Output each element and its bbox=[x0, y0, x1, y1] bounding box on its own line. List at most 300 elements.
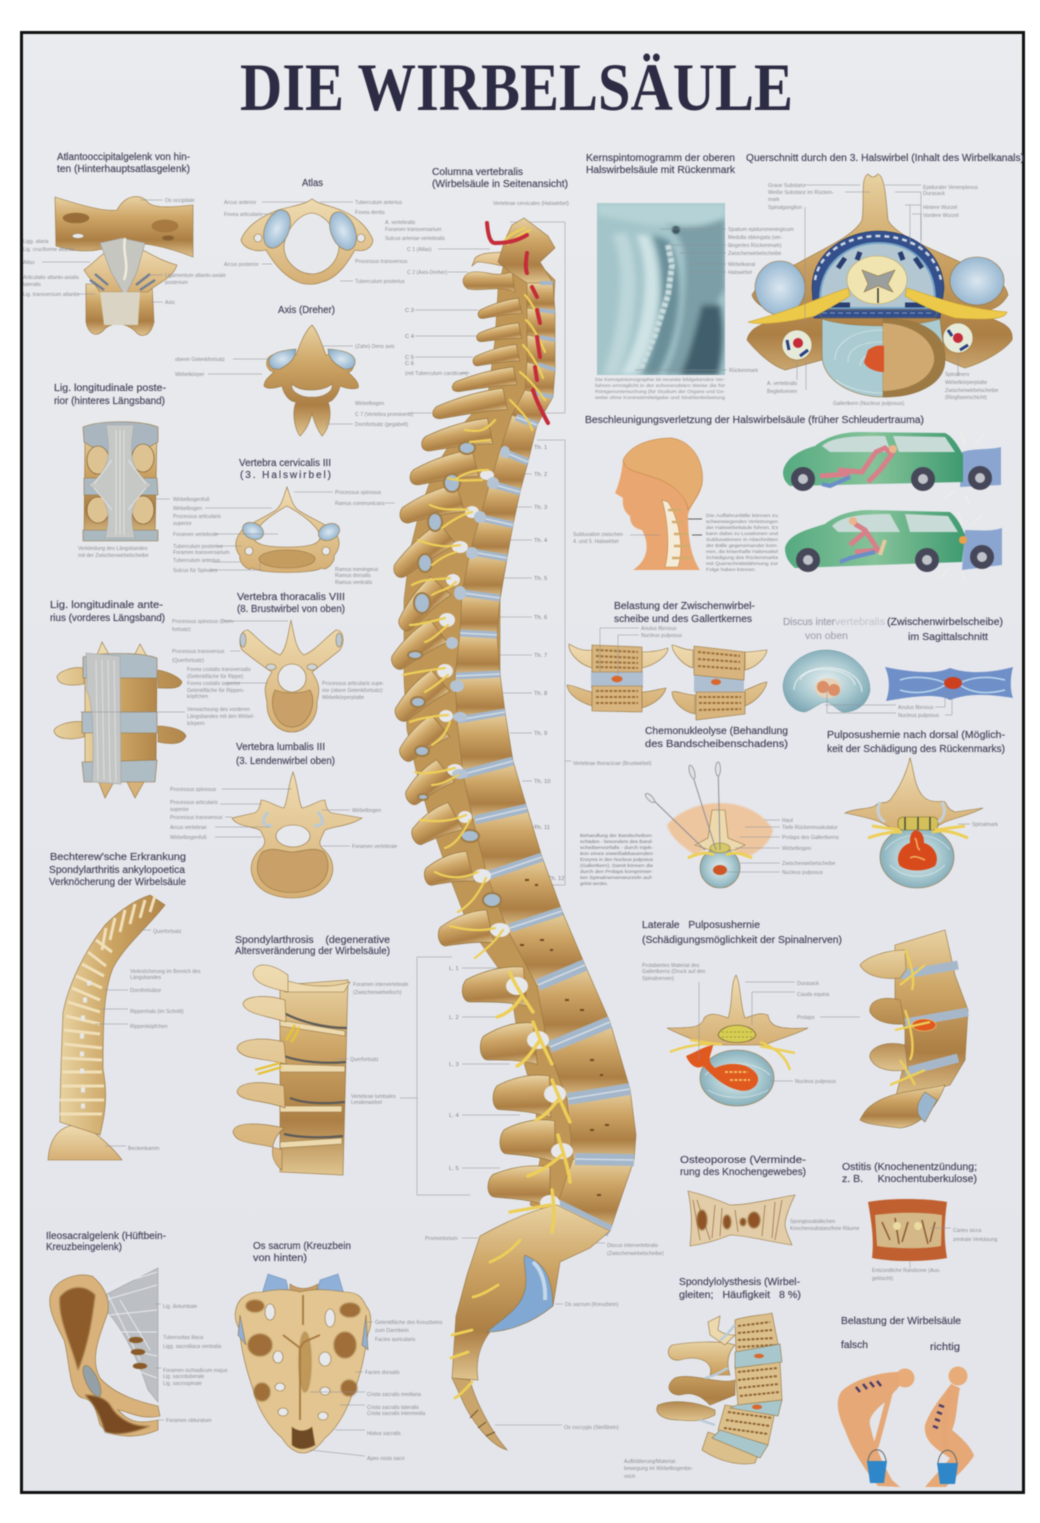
brackets and spine labels: Th. 7 bbox=[534, 653, 547, 659]
labels: Tuberositas iliaca bbox=[163, 1335, 203, 1341]
labels: Verknöcherung im Bereich des bbox=[130, 969, 201, 975]
labels: Caries sicca bbox=[953, 1228, 981, 1234]
labels: Fovea dentis bbox=[355, 210, 385, 216]
brackets and spine labels: L. 2 bbox=[449, 1015, 459, 1021]
panel: Querschnitt Halswirbel bbox=[746, 153, 1024, 407]
labels: zum Darmbein bbox=[375, 1328, 409, 1334]
labels: Tuberculum posterius bbox=[173, 544, 223, 550]
illustration: inflamed vertebra bbox=[868, 1199, 947, 1261]
heading: (Zwischenwirbelscheibe) bbox=[887, 617, 1003, 628]
labels bbox=[335, 982, 408, 1106]
labels: Fovea articularis bbox=[224, 212, 262, 218]
labels: Processus articularis bbox=[170, 800, 218, 806]
heading: Altersveränderung der Wirbelsäule) bbox=[235, 946, 390, 957]
heading: Kernspintomogramm der oberen bbox=[586, 153, 735, 164]
labels bbox=[767, 183, 998, 407]
illustration: degenerated vertebrae bbox=[233, 965, 350, 1175]
heading: Bechterew'sche Erkrankung bbox=[50, 852, 186, 863]
brackets and spine labels: (mit Tuberculum caroticum) bbox=[405, 371, 468, 377]
illustration: osteoporotic vertebra bbox=[688, 1191, 795, 1246]
labels: Sulcus arteriae vertebralis bbox=[385, 236, 445, 242]
brackets and spine labels: L. 5 bbox=[449, 1166, 459, 1172]
heading: (8. Brustwirbel von oben) bbox=[237, 604, 345, 615]
labels: Spongiosabälkchen bbox=[790, 1219, 835, 1225]
heading: rung des Knochengewebes) bbox=[680, 1167, 806, 1178]
labels bbox=[790, 1219, 860, 1232]
labels: Arcus anterior bbox=[224, 200, 257, 206]
caption: Röntgenuntersuchung (für Studium der Organe und Ge- bbox=[595, 389, 726, 394]
labels: Halswirbel bbox=[728, 270, 752, 276]
labels: Wirbelkanal bbox=[728, 262, 755, 268]
brackets and spine labels: Th. 9 bbox=[534, 731, 547, 737]
panel: Os sacrum bbox=[235, 1241, 443, 1462]
heading bbox=[49, 852, 186, 888]
illustration: loaded disc bbox=[672, 645, 767, 720]
labels bbox=[725, 818, 839, 876]
labels: Wirbelbogen bbox=[173, 506, 202, 512]
heading: Atlas bbox=[302, 178, 323, 189]
labels: Medulla oblongata (ver- bbox=[728, 235, 783, 241]
labels: Arcus vertebrae bbox=[170, 825, 207, 831]
labels: Wirbelkörperplatte bbox=[322, 695, 364, 701]
explanatory text: (Gallertkern). Damit können die bbox=[580, 863, 653, 869]
neural arch backing bbox=[404, 235, 600, 1215]
heading: ten (Hinterhauptsatlasgelenk) bbox=[57, 164, 190, 175]
vertebral bodies bbox=[455, 283, 636, 1231]
brackets and spine labels: Vertebrae thoracicae (Brustwirbel) bbox=[573, 761, 652, 767]
labels: (Gelenkfläche für Rippe) bbox=[187, 674, 243, 680]
illustration: slipped vertebrae bbox=[657, 1313, 782, 1464]
heading: Querschnitt durch den 3. Halswirbel (Inhalt des Wirbelkanals) bbox=[746, 153, 1024, 164]
brackets and spine labels: L. 3 bbox=[449, 1062, 459, 1068]
labels: Articulatio atlanto-axialis bbox=[23, 275, 79, 281]
brackets and spine labels: Th. 2 bbox=[534, 472, 547, 478]
heading: Lig. longitudinale poste- bbox=[54, 383, 166, 394]
labels bbox=[155, 490, 395, 586]
heading: Pulposushernie nach dorsal (Möglich- bbox=[827, 730, 1005, 741]
labels: Ramus dorsalis bbox=[335, 573, 371, 579]
labels: gelöscht) bbox=[872, 1276, 893, 1282]
labels bbox=[23, 198, 226, 306]
heading: Vertebra cervicalis III bbox=[239, 458, 331, 469]
labels: (Querfortsatz) bbox=[172, 658, 204, 664]
labels: reich bbox=[624, 1474, 635, 1480]
labels: (Zwischenwirbelloch) bbox=[353, 990, 402, 996]
labels: Rippenköpfchen bbox=[130, 1024, 168, 1030]
labels: Sulcus für Spinales bbox=[173, 568, 218, 574]
labels: Vertebrae lumbales bbox=[351, 1094, 396, 1100]
heading bbox=[645, 726, 788, 750]
explanatory text: schwerwiegenden Verletzungen bbox=[706, 519, 778, 525]
figure: wrong posture bbox=[838, 1368, 914, 1487]
illustration: front impact car bbox=[785, 510, 1002, 582]
brackets and spine labels: C 6 bbox=[405, 361, 414, 367]
labels: Wirbelbogen bbox=[355, 401, 384, 407]
labels: Lig. iliolumbale bbox=[163, 1304, 197, 1310]
labels: köpfchen bbox=[187, 694, 208, 700]
illustration: lateral herniation side view bbox=[860, 930, 968, 1128]
heading bbox=[783, 617, 1003, 643]
brackets and spine labels: Th. 12 bbox=[548, 876, 564, 882]
brackets and spine labels: C 3 bbox=[405, 308, 414, 314]
labels: Verwachsung des vorderen bbox=[187, 707, 250, 713]
labels: Lendenwirbel bbox=[351, 1100, 382, 1106]
brackets and spine labels: Promontorium bbox=[425, 1236, 458, 1242]
cross section illustration bbox=[747, 174, 1012, 397]
labels: Dornfortsatz (gegabelt) bbox=[355, 422, 408, 428]
brackets and spine labels: Th. 4 bbox=[534, 538, 548, 544]
illustration: lateral herniation top view bbox=[667, 975, 808, 1106]
panel: Spondylolysthesis bbox=[624, 1277, 801, 1480]
labels: Foramen intervertebrale bbox=[353, 982, 408, 988]
labels: Durasack bbox=[797, 981, 819, 987]
heading: Vertebra lumbalis III bbox=[236, 742, 325, 753]
labels bbox=[642, 963, 860, 1085]
labels: posterium bbox=[165, 280, 188, 286]
labels: Wirbelbogenfuß bbox=[173, 497, 210, 503]
illustration: L3 vertebra bbox=[232, 772, 362, 898]
heading: Ostitis (Knochenentzündung; bbox=[842, 1162, 977, 1173]
nerves bbox=[403, 228, 570, 1398]
illustration: atlas bbox=[241, 199, 373, 284]
heading: Lig. longitudinale ante- bbox=[50, 600, 163, 611]
heading: Atlantooccipitalgelenk von hin- bbox=[57, 152, 190, 163]
explanatory text bbox=[580, 833, 654, 887]
labels: Anulus fibrosus bbox=[898, 705, 934, 711]
labels: Processus spinosus bbox=[170, 787, 217, 793]
labels: Prolaps des Gallertkerns bbox=[782, 835, 839, 841]
heading: Halswirbelsäule mit Rückenmark bbox=[586, 165, 736, 176]
explanatory text: Schädigung des Rückenmarks bbox=[706, 555, 779, 561]
heading bbox=[680, 1155, 806, 1178]
labels: Graue Substanz bbox=[768, 183, 806, 189]
panel: Ileosacralgelenk bbox=[46, 1231, 228, 1436]
heading: Spondylarthrosis (degenerative bbox=[235, 935, 390, 946]
labels: Dornfortsätze bbox=[130, 988, 161, 994]
labels: Crista sacralis lateralis bbox=[367, 1405, 419, 1411]
heading: Verknöcherung der Wirbelsäule bbox=[49, 877, 186, 888]
explanatory text: der Halswirbelsäule führen. Es bbox=[706, 525, 779, 531]
heading: Belastung der Wirbelsäule bbox=[841, 1316, 961, 1327]
title: DIE WIRBELSÄULE bbox=[240, 49, 793, 125]
heading bbox=[235, 935, 390, 957]
labels: Vordere Wurzel bbox=[923, 213, 959, 219]
heading bbox=[642, 920, 842, 946]
heading: Belastung der Zwischenwirbel- bbox=[614, 601, 755, 612]
labels: Foramen vertebrale bbox=[173, 532, 218, 538]
explanatory text bbox=[706, 513, 779, 573]
labels: Nucleus pulposus bbox=[898, 713, 939, 719]
labels: Wirbelbogen bbox=[352, 808, 381, 814]
labels: (Ringfaserschicht) bbox=[945, 395, 987, 401]
brackets and spine labels: Th. 1 bbox=[534, 445, 547, 451]
labels: Begleitvenen bbox=[767, 389, 797, 395]
labels: A. vertebralis bbox=[767, 381, 798, 387]
labels: Lig. cruciforme atlantis bbox=[23, 247, 75, 253]
heading: z. B. Knochentuberkulose) bbox=[842, 1174, 977, 1185]
labels: Zwischenwirbelscheibe bbox=[728, 251, 781, 257]
heading: scheibe und des Gallertkernes bbox=[614, 614, 752, 625]
labels: (Zahn) Dens axis bbox=[355, 344, 395, 350]
heading bbox=[57, 152, 190, 175]
illustration: needles into disc bbox=[644, 762, 773, 888]
explanatory text: tion eines eiweißabbauenden bbox=[580, 851, 653, 857]
labels: Wirbelbogenfuß bbox=[170, 835, 207, 841]
labels: Längsbandes mit den Wirbel- bbox=[187, 714, 255, 720]
panel: Beschleunigungsverletzung bbox=[573, 415, 1002, 582]
explanatory text: gelöst werden. bbox=[580, 881, 608, 887]
labels bbox=[825, 690, 952, 719]
explanatory text: Die Auffahrunfälle können zu bbox=[706, 513, 778, 519]
labels: Spinalnerven) bbox=[642, 976, 674, 982]
labels: Spatium epiduromeningicum bbox=[728, 227, 794, 233]
heading: (3. Halswirbel) bbox=[240, 470, 331, 481]
explanatory text: scheibenvorfalls - durch Injek- bbox=[580, 845, 653, 851]
illustration: T8 vertebra bbox=[240, 620, 343, 732]
heading: (3. Lendenwirbel oben) bbox=[236, 756, 335, 767]
labels: Hiatus sacralis bbox=[367, 1431, 401, 1437]
labels: Spinalnerv bbox=[945, 372, 970, 378]
labels: Os occipitale bbox=[165, 198, 195, 204]
labels: Nucleus pulposus bbox=[641, 633, 682, 639]
labels: Haut bbox=[782, 818, 794, 824]
heading: Spondylolysthesis (Wirbel- bbox=[679, 1277, 800, 1288]
labels: Gallertkern (Nucleus pulposus) bbox=[833, 401, 904, 407]
labels: Processus transversus bbox=[170, 815, 223, 821]
panel: Spondylarthrosis bbox=[233, 935, 408, 1175]
labels: Wirbelkörperplatte bbox=[945, 380, 987, 386]
labels bbox=[958, 822, 998, 828]
heading: Os sacrum (Kreuzbein bbox=[253, 1241, 351, 1252]
brackets and spine labels: L. 1 bbox=[449, 966, 459, 972]
intervertebral foramina bbox=[437, 470, 573, 1211]
panel: Chemonukleolyse bbox=[580, 726, 839, 888]
labels: Tiefe Rückenmuskulatur bbox=[782, 825, 838, 831]
panel: Laterale Pulposushernie bbox=[642, 920, 968, 1128]
illustration: neutral disc bbox=[567, 644, 668, 712]
labels: Arcus posterior bbox=[224, 262, 259, 268]
labels: Längsbandes bbox=[130, 975, 162, 981]
labels: Hintere Wurzel bbox=[923, 205, 957, 211]
labels: Facies dorsalis bbox=[365, 1370, 400, 1376]
illustration: rear impact car bbox=[783, 430, 1001, 505]
labels: mark bbox=[768, 197, 780, 203]
label: richtig: richtig bbox=[930, 1342, 960, 1353]
panel: Pulposushernie nach dorsal bbox=[827, 730, 1005, 888]
explanatory text: Enzyms in den Nucleus pulposus bbox=[580, 857, 654, 863]
bone pores bbox=[520, 880, 609, 1195]
brackets and spine labels: C 2 (Axis-Dreher) bbox=[407, 270, 448, 276]
labels: Verkleidung des Längsbandes bbox=[78, 546, 148, 552]
labels bbox=[95, 929, 201, 1152]
labels: C 7 (Vertebra prominens) bbox=[355, 412, 414, 418]
labels: Subluxation zwischen bbox=[573, 532, 623, 538]
brackets and spine labels: Th. 11 bbox=[534, 825, 550, 831]
explanatory text: mit Querschnittslähmung zur bbox=[706, 561, 778, 567]
heading: Laterale Pulposushernie bbox=[642, 920, 760, 931]
labels: rior (obere Gelenkfortsatz) bbox=[322, 688, 383, 694]
explanatory text: Subluxationen in Abschnitten bbox=[706, 537, 778, 543]
explanatory text: men, die krisenhafte Halsmuskel bbox=[706, 549, 778, 555]
labels: Ramus ventralis bbox=[335, 580, 373, 586]
brackets and spine labels: Discus intervertebralis bbox=[607, 1243, 658, 1249]
panel: Discus intervertebralis bbox=[783, 617, 1013, 719]
labels: Ramus meningeus bbox=[335, 567, 379, 573]
label: falsch: falsch bbox=[841, 1340, 868, 1351]
labels: lateralis bbox=[23, 282, 41, 288]
illustration: anterior ligament bbox=[54, 642, 186, 798]
heading bbox=[239, 458, 331, 481]
labels: Foramen transversarium bbox=[385, 227, 442, 233]
labels: Fovea costalis superior bbox=[187, 681, 241, 687]
labels: Crista sacralis intermedia bbox=[367, 1411, 425, 1417]
labels: Ligamentum atlanto-axiale bbox=[165, 273, 226, 279]
labels: Zwischenwirbelscheibe bbox=[945, 388, 998, 394]
explanatory text: Behandlung der Bandscheiben- bbox=[580, 833, 653, 839]
labels: Processus transversus bbox=[172, 649, 225, 655]
labels: Entzündliche Randzone (Aus- bbox=[872, 1268, 941, 1274]
illustration: posterior ligament bbox=[83, 422, 158, 541]
panel: Atlantooccipitalgelenk bbox=[23, 152, 226, 335]
panel: Lig. longitudinale anterius bbox=[50, 600, 186, 798]
labels: Gelenkfläche des Kreuzbeins bbox=[375, 1320, 443, 1326]
panel: Bechterew bbox=[48, 852, 201, 1160]
brackets and spine labels: Th. 5 bbox=[534, 576, 547, 582]
labels: Wirbelkörper bbox=[175, 372, 205, 378]
brackets and spine labels: C 1 (Atlas) bbox=[407, 247, 432, 253]
labels: Anulus fibrosus bbox=[641, 626, 677, 632]
intervertebral discs bbox=[456, 283, 634, 1231]
illustration: disc from above bbox=[783, 650, 870, 712]
heading: im Sagittalschnitt bbox=[908, 632, 988, 643]
explanatory text: Folge haben können. bbox=[706, 567, 756, 573]
labels: Processus spinosus bbox=[335, 490, 382, 496]
MRI image bbox=[596, 202, 726, 376]
labels: oberer Gelenkfortsatz bbox=[175, 357, 225, 363]
panel: Osteoporose bbox=[680, 1155, 860, 1246]
spinous and transverse processes bbox=[384, 250, 555, 1206]
labels: Weiße Substanz im Rücken- bbox=[768, 190, 834, 196]
labels: Processus articularis bbox=[173, 514, 221, 520]
labels: Spinalganglion bbox=[768, 205, 802, 211]
brackets and spine labels: Th. 8 bbox=[534, 691, 547, 697]
articular facets bbox=[408, 442, 510, 907]
spine illustration bbox=[384, 218, 636, 1450]
figure: correct posture bbox=[925, 1366, 974, 1487]
brackets and spine labels: Vertebrae cervicales (Halswirbel) bbox=[493, 201, 569, 207]
heading: rius (vorderes Längsband) bbox=[50, 613, 165, 624]
labels: mit der Zwischenwirbelscheibe bbox=[78, 553, 149, 559]
heading bbox=[614, 601, 755, 625]
labels: Gallertkerns (Druck auf den bbox=[642, 969, 706, 975]
brackets and spine labels: Th. 6 bbox=[534, 615, 547, 621]
labels: Ramus communicans bbox=[335, 501, 385, 507]
panel: Belastung der Wirbelsäule bbox=[838, 1316, 974, 1487]
brackets and spine labels: C 4 bbox=[405, 334, 415, 340]
labels: Rückenmark bbox=[729, 368, 759, 374]
heading: (Wirbelsäule in Seitenansicht) bbox=[432, 179, 568, 190]
heading bbox=[46, 1231, 166, 1253]
labels bbox=[155, 1304, 228, 1424]
panel: Vertebra cervicalis III bbox=[155, 458, 395, 586]
labels bbox=[175, 344, 414, 428]
labels bbox=[310, 1320, 443, 1462]
panel: Atlas bbox=[224, 178, 445, 285]
caption: Die Kernspintomographie ist neueste bildgebendes Ver- bbox=[595, 377, 726, 382]
labels: Atlas bbox=[23, 260, 35, 266]
labels: Tuberculum anterius bbox=[355, 200, 402, 206]
illustration: axis bbox=[264, 325, 358, 436]
labels bbox=[170, 787, 397, 850]
labels: Cauda equina bbox=[797, 992, 829, 998]
labels: körpern bbox=[187, 721, 205, 727]
heading: Osteoporose (Verminde- bbox=[680, 1155, 806, 1166]
labels: Nucleus pulposus bbox=[795, 1079, 836, 1085]
illustration: ankylosed spine bbox=[48, 895, 165, 1160]
panel: Axis bbox=[175, 305, 414, 436]
heading: gleiten; Häufigkeit 8 %) bbox=[679, 1290, 801, 1301]
heading: vertebralis bbox=[835, 617, 885, 628]
brackets and spine labels: (Zwischenwirbelscheibe) bbox=[607, 1251, 664, 1257]
labels bbox=[78, 546, 149, 559]
illustration: sacrum bbox=[235, 1274, 371, 1453]
heading: Chemonukleolyse (Behandlung bbox=[645, 726, 788, 737]
heading: keit der Schädigung des Rückenmarks) bbox=[827, 744, 1005, 755]
heading: rior (hinteres Längsband) bbox=[54, 396, 165, 407]
explanatory text: schäden - besonders des Band- bbox=[580, 839, 653, 845]
labels: Tuberculum posterius bbox=[355, 279, 405, 285]
labels bbox=[224, 200, 445, 285]
labels: Processus transversus bbox=[355, 259, 408, 265]
heading bbox=[236, 742, 335, 767]
labels: 4. und 5. Halswirbel bbox=[573, 539, 619, 545]
labels: Processus spinosus (Dorn- bbox=[172, 619, 235, 625]
illustration: head with cervical spine bbox=[615, 438, 703, 570]
labels: Querfortsatz bbox=[350, 1057, 379, 1063]
labels: Foramen vertebrale bbox=[352, 844, 397, 850]
labels: Lig. sacrotuberale bbox=[163, 1374, 204, 1380]
labels: Apex ossis sacri bbox=[367, 1456, 404, 1462]
heading bbox=[679, 1277, 801, 1301]
labels: Gelenkfläche für Rippen- bbox=[187, 688, 245, 694]
brackets and spine labels bbox=[400, 201, 664, 1431]
labels: Nucleus pulposus bbox=[782, 870, 823, 876]
heading: (Schädigungsmöglichkeit der Spinalnerven) bbox=[642, 935, 842, 946]
panel: Ostitis bbox=[842, 1162, 998, 1282]
labels bbox=[624, 1459, 693, 1480]
panel: Columna vertebralis main spine bbox=[384, 167, 664, 1450]
heading: von oben bbox=[805, 631, 848, 642]
caption: webe ohne Kontrastmittelgabe und Strahlenbelastung bbox=[595, 395, 726, 400]
illustration: pelvis bbox=[50, 1268, 160, 1436]
vertebral artery bbox=[487, 223, 548, 423]
caption: fahren ermöglicht in der schonendsten Weise die für bbox=[595, 383, 726, 388]
panel: Kernspintomogramm bbox=[586, 153, 794, 400]
labels: Facies auricularis bbox=[375, 1337, 416, 1343]
labels bbox=[600, 626, 682, 675]
labels: Knochensubstanzfreie Räume bbox=[790, 1226, 860, 1232]
heading bbox=[842, 1162, 977, 1185]
labels: Lig. transversum atlantis bbox=[23, 292, 80, 298]
explanatory text: ten Spinalnervenwurzeln auf- bbox=[580, 875, 653, 881]
labels: Aufblätterung/Material- bbox=[624, 1459, 677, 1465]
labels: Axis bbox=[165, 300, 175, 306]
brackets and spine labels: Os sacrum (Kreuzbein) bbox=[565, 1302, 619, 1308]
panel: Vertebra thoracalis VIII bbox=[80, 592, 385, 732]
labels: Ligg. alaria bbox=[23, 239, 48, 245]
caption bbox=[595, 377, 726, 400]
labels: Ligg. sacroiliaca ventralia bbox=[163, 1344, 221, 1350]
